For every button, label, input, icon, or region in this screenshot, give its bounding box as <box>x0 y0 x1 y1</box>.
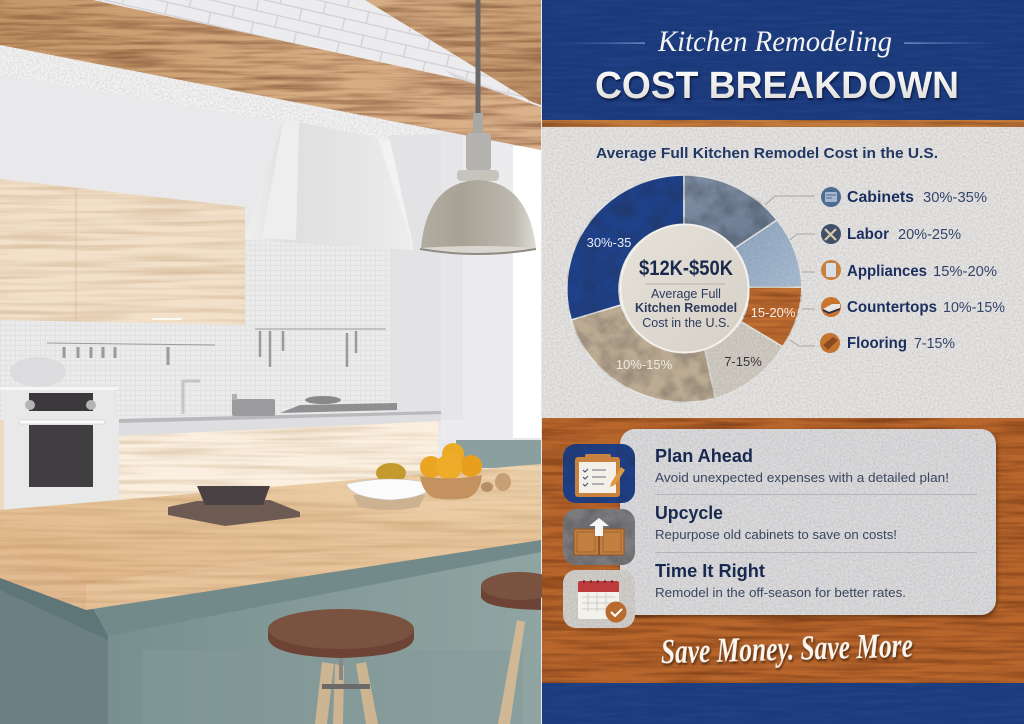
tagline script: Save Money. Save More <box>660 626 913 671</box>
panel: bottom blue band <box>542 683 1024 724</box>
divider two <box>655 552 977 553</box>
panel: header <box>542 0 1024 120</box>
slice value labels <box>587 235 796 372</box>
value 10-15: 10%-15% <box>616 357 673 372</box>
legend: countertops <box>821 297 1005 317</box>
value 30-35: 30%-35 <box>587 235 631 250</box>
slice: slate <box>684 175 777 248</box>
slice: light blue <box>735 220 802 287</box>
legend: labor <box>821 224 961 244</box>
oranges in wooden bowl <box>420 443 511 500</box>
tip: upcycle: Repurpose old cabinets to save on costs! <box>655 527 897 542</box>
icon: cabinets with arrow <box>563 509 635 565</box>
tip: time it right: Remodel in the off-season for better rates. <box>655 585 906 600</box>
legend: flooring: 7-15% <box>914 336 955 352</box>
roof beam <box>365 0 541 105</box>
slice: orange wood <box>741 287 802 347</box>
center caption: Kitchen Remodel <box>635 301 737 315</box>
panel: wood tips section <box>542 418 1024 683</box>
icon: clipboard plan <box>563 444 635 503</box>
tip: upcycle: Upcycle <box>655 503 723 523</box>
rough plaster under beam <box>0 45 450 140</box>
legend: appliances <box>821 260 997 280</box>
legend: flooring <box>820 333 955 353</box>
tip: plan ahead: Avoid unexpected expenses with a detailed plan! <box>655 470 949 485</box>
slice: light stone <box>704 322 783 398</box>
oven <box>0 387 118 510</box>
lower counter and cabinets <box>0 411 441 510</box>
legend: labor: Labor <box>847 226 889 243</box>
legend: cabinets: 30%-35% <box>923 190 987 206</box>
mosaic backsplash <box>0 240 390 418</box>
center caption: Average Full <box>651 287 721 301</box>
upper cabinet <box>0 179 245 325</box>
subtitle script: Kitchen Remodeling <box>657 25 892 58</box>
legend: labor: 20%-25% <box>898 227 961 243</box>
connector lines <box>765 196 815 346</box>
legend: cabinets: Cabinets <box>847 189 914 206</box>
utensil rails <box>47 329 386 367</box>
value 15-20: 15-20% <box>751 305 796 320</box>
pendant lamp <box>420 0 536 255</box>
tip: time it right: Time It Right <box>655 561 765 581</box>
legend <box>820 187 1005 353</box>
center caption <box>635 287 737 330</box>
legend: countertops: Countertops <box>847 299 937 316</box>
white fruit bowl <box>346 463 434 510</box>
legend: appliances: 15%-20% <box>933 264 997 280</box>
slice: tan stone <box>571 305 715 402</box>
chart heading: Average Full Kitchen Remodel Cost in the U.S. <box>596 145 938 162</box>
tips card <box>620 429 996 615</box>
tip: plan ahead: Plan Ahead <box>655 446 753 466</box>
tip: time it right <box>655 561 906 600</box>
island base <box>0 532 541 724</box>
value 7-15: 7-15% <box>724 354 762 369</box>
icon: calendar <box>563 570 635 628</box>
legend: flooring: Flooring <box>847 335 907 352</box>
front stool <box>268 609 414 724</box>
donut chart <box>567 175 802 402</box>
stacked tray <box>168 486 300 526</box>
window-side island end <box>456 440 541 468</box>
header rule left <box>568 42 645 44</box>
bowl on oven <box>10 357 66 387</box>
tip: upcycle <box>655 503 897 542</box>
divider in center <box>645 284 725 285</box>
price range: $12K-$50K <box>639 257 733 280</box>
center caption: Cost in the U.S. <box>642 316 730 330</box>
header rule right <box>904 42 1000 44</box>
legend: cabinets <box>821 187 987 207</box>
faucet, pot and hob <box>183 381 397 416</box>
center disc <box>620 224 748 352</box>
range hood <box>245 122 414 250</box>
panel: cost breakdown chart <box>542 127 1024 418</box>
main title: COST BREAKDOWN <box>595 65 959 107</box>
slice: cabinets blue <box>567 175 684 320</box>
divider one <box>655 494 977 495</box>
legend: countertops: 10%-15% <box>943 300 1005 316</box>
island wooden top <box>0 464 541 610</box>
wood strip under header <box>542 120 1024 127</box>
brick wall <box>93 0 541 105</box>
legend: appliances: Appliances <box>847 263 927 280</box>
panel: kitchen photo <box>0 0 559 724</box>
center price text <box>635 257 737 330</box>
right wall and window <box>390 130 541 440</box>
tip: plan ahead <box>655 446 949 485</box>
main ceiling beam <box>0 0 541 150</box>
back stool <box>481 572 559 724</box>
